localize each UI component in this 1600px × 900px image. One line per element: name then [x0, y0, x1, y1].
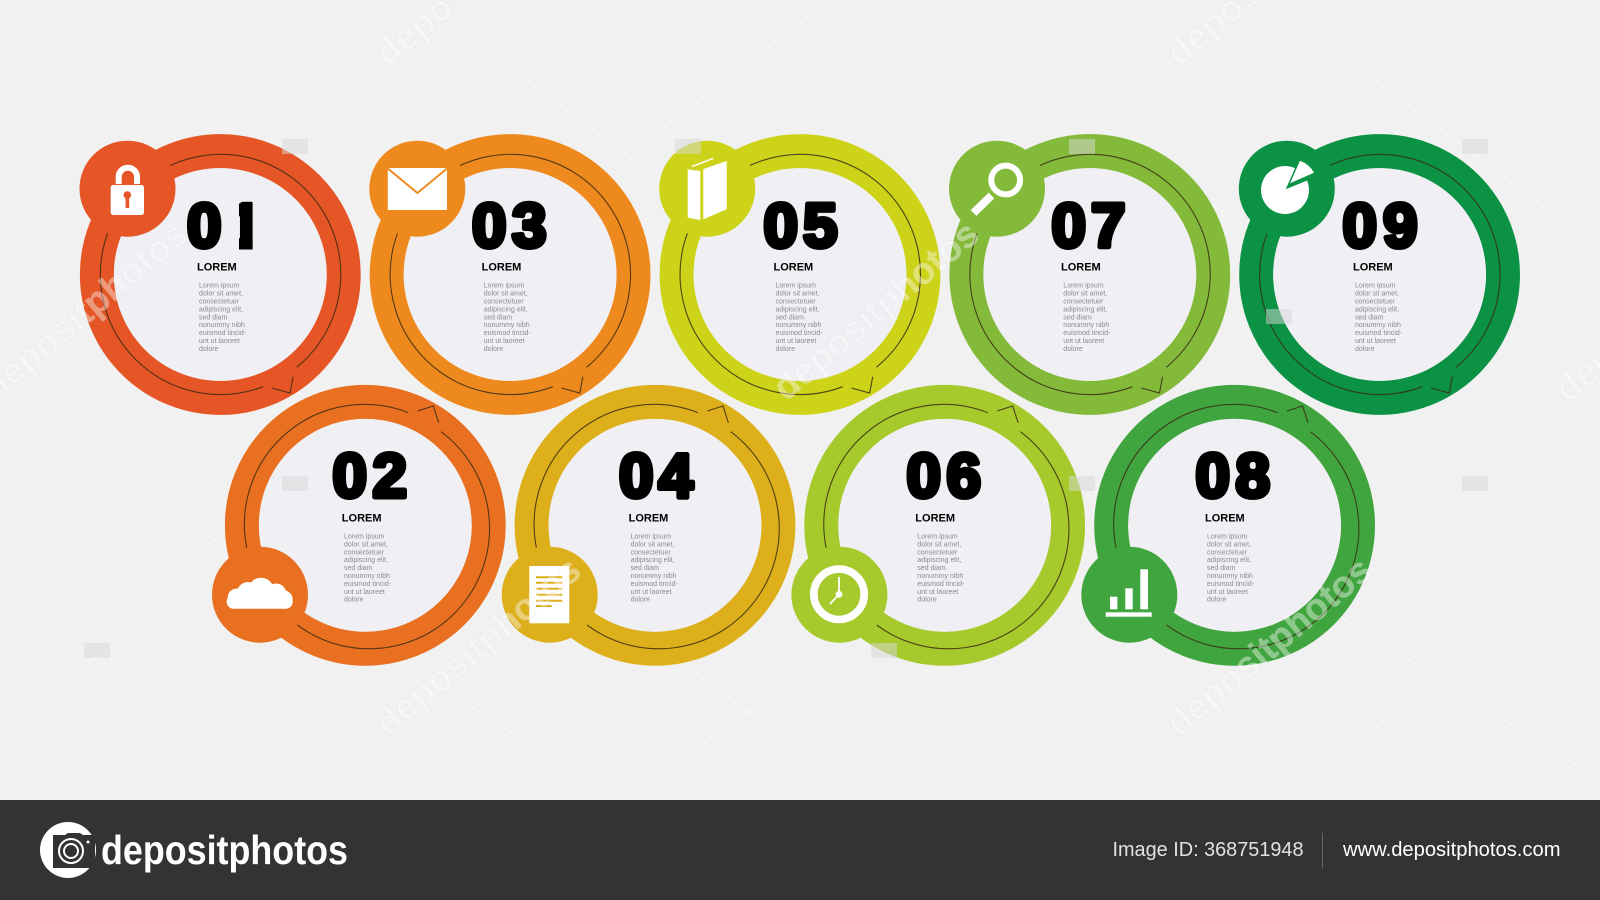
panel: step 04 [502, 402, 779, 649]
body text: sed diam [776, 314, 804, 321]
number 05: 05 [764, 192, 837, 261]
panel: step 07 [949, 141, 1213, 398]
panel: step 02 [212, 402, 490, 649]
body text: dolore [199, 346, 219, 353]
body text: nonummy nibh [917, 573, 963, 580]
body text: adipiscing elit, [917, 557, 961, 564]
body text: unt ut laoreet [776, 338, 816, 345]
body text: dolor sit amet, [484, 291, 528, 298]
number 03: 03 [472, 192, 546, 261]
icon: padlock [111, 168, 144, 215]
body text: adipiscing elit, [344, 557, 388, 564]
body text: consectetuer [1355, 298, 1396, 306]
footer bar [0, 800, 1600, 900]
body text: unt ut laoreet [631, 589, 672, 596]
body text: consectetuer [631, 549, 671, 556]
body text: consectetuer [917, 549, 958, 556]
body text: adipiscing elit, [1207, 557, 1251, 564]
body text: nonummy nibh [1355, 322, 1401, 329]
panel: step 01 [80, 141, 344, 398]
body text: consectetuer [1207, 549, 1248, 556]
heading: LOREM [482, 262, 521, 274]
body text: euismod tincid- [1355, 330, 1403, 337]
logo: wordmark: depositphotos [101, 827, 348, 873]
body text: sed diam [1063, 314, 1092, 321]
number 08: 08 [1196, 442, 1270, 511]
number 09: 09 [1342, 192, 1417, 261]
body text: consectetuer [484, 298, 524, 306]
body text: unt ut laoreet [344, 589, 385, 596]
body text: Lorem ipsum [917, 534, 958, 540]
body text: euismod tincid- [484, 330, 531, 337]
body text: unt ut laoreet [1063, 338, 1104, 345]
body text: adipiscing elit, [776, 306, 820, 313]
body text: adipiscing elit, [1355, 306, 1399, 313]
body text: sed diam [1355, 314, 1384, 321]
body text: consectetuer [1063, 298, 1104, 306]
icon: book [688, 158, 727, 220]
body text: Lorem ipsum [484, 283, 524, 290]
body text: dolor sit amet, [1207, 541, 1251, 548]
watermark: camera marks [84, 139, 1488, 658]
heading: LOREM [1061, 262, 1101, 274]
body text: sed diam [917, 565, 946, 572]
body text: dolore [484, 346, 503, 353]
body text: euismod tincid- [199, 330, 247, 337]
watermark: depositphotos text: depositphotos [367, 549, 588, 744]
panel: step 08 [1081, 402, 1359, 649]
icon: clock [814, 569, 864, 620]
body text: adipiscing elit, [199, 306, 243, 313]
body text: dolor sit amet, [199, 291, 243, 298]
body text: dolore [776, 346, 795, 353]
heading: LOREM [197, 262, 237, 274]
body text: Lorem ipsum [1063, 283, 1104, 290]
icon: envelope [388, 168, 447, 210]
body text: unt ut laoreet [199, 338, 240, 345]
body text: nonummy nibh [631, 573, 677, 580]
body text: nonummy nibh [776, 322, 822, 329]
body text: unt ut laoreet [484, 338, 525, 345]
body text: nonummy nibh [1207, 573, 1253, 580]
logo: camera badge [40, 822, 96, 878]
body text: Lorem ipsum [199, 283, 240, 290]
body text: Lorem ipsum [344, 534, 385, 540]
body text: dolor sit amet, [631, 541, 675, 548]
icon: document [529, 566, 569, 623]
icon: cloud [227, 578, 293, 609]
body text: dolor sit amet, [344, 541, 388, 548]
panel: step 03 [369, 141, 634, 398]
body text: adipiscing elit, [1063, 306, 1107, 313]
heading: LOREM [1353, 262, 1393, 274]
number 06: 06 [906, 442, 981, 511]
body text: unt ut laoreet [1207, 589, 1248, 596]
body text: dolore [1063, 346, 1083, 353]
body text: dolor sit amet, [917, 541, 961, 548]
body text: euismod tincid- [917, 581, 965, 588]
number 07: 07 [1052, 192, 1125, 261]
body text: Lorem ipsum [1207, 534, 1248, 540]
panel: step 06 [791, 402, 1069, 649]
body text: consectetuer [776, 298, 816, 306]
body text: dolore [917, 597, 937, 604]
watermark: depositphotos text: depositphotos [1158, 549, 1379, 744]
panel: step 09 [1239, 141, 1503, 398]
image id: Image ID: 368751948 [1112, 839, 1304, 861]
body text: Lorem ipsum [1355, 283, 1396, 290]
body text: dolore [631, 597, 650, 604]
heading: LOREM [915, 512, 955, 524]
body text: dolor sit amet, [1063, 291, 1107, 298]
body text: Lorem ipsum [631, 534, 671, 540]
body text: dolore [1355, 346, 1375, 353]
body text: euismod tincid- [344, 581, 392, 588]
heading: LOREM [774, 262, 813, 274]
body text: euismod tincid- [776, 330, 823, 337]
body text: sed diam [199, 314, 228, 321]
body text: consectetuer [199, 298, 240, 306]
body text: euismod tincid- [1207, 581, 1255, 588]
body text: consectetuer [344, 549, 385, 556]
heading: LOREM [342, 512, 382, 524]
body text: dolore [1207, 597, 1227, 604]
heading: LOREM [629, 512, 668, 524]
watermark: depositphotos text: depositphotos [765, 213, 986, 408]
number 02: 02 [332, 442, 407, 511]
body text: adipiscing elit, [631, 557, 675, 564]
heading: LOREM [1205, 512, 1245, 524]
number 01: 01 [187, 192, 262, 261]
body text: adipiscing elit, [484, 306, 528, 313]
body text: nonummy nibh [484, 322, 530, 329]
panel: step 05 [659, 141, 923, 398]
body text: unt ut laoreet [917, 589, 958, 596]
icon: bar chart [1106, 569, 1152, 617]
body text: euismod tincid- [1063, 330, 1111, 337]
number 04: 04 [619, 442, 694, 511]
body text: sed diam [344, 565, 373, 572]
body text: nonummy nibh [199, 322, 245, 329]
body text: euismod tincid- [631, 581, 678, 588]
body text: dolor sit amet, [1355, 291, 1399, 298]
body text: nonummy nibh [1063, 322, 1109, 329]
body text: sed diam [484, 314, 512, 321]
body text: sed diam [1207, 565, 1236, 572]
body text: sed diam [631, 565, 659, 572]
body text: Lorem ipsum [776, 283, 816, 290]
body text: dolor sit amet, [776, 291, 820, 298]
body text: nonummy nibh [344, 573, 390, 580]
body text: unt ut laoreet [1355, 338, 1396, 345]
icon: magnifier [974, 166, 1020, 213]
website: www.depositphotos.com [1342, 839, 1560, 861]
icon: pie chart [1261, 157, 1328, 214]
body text: dolore [344, 597, 364, 604]
